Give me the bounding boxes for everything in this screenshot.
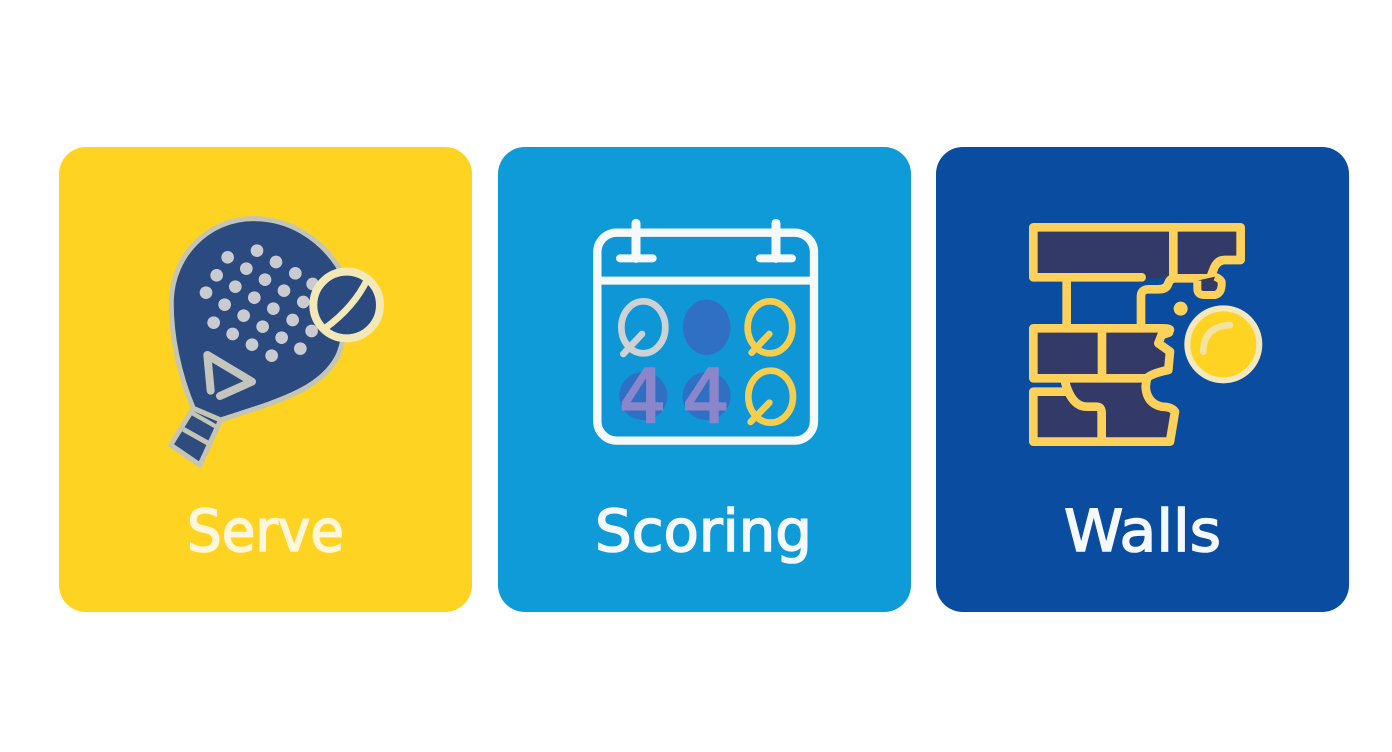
brick fills (1033, 227, 1241, 442)
icon: calendar scoreboard (597, 223, 814, 441)
brick outlines (1033, 227, 1241, 442)
score four middle: 4 (682, 354, 730, 440)
racket holes (200, 244, 319, 362)
score zero yellow top (748, 301, 792, 353)
ball (1187, 308, 1259, 380)
score four left: 4 (619, 354, 666, 440)
racket handle (171, 408, 221, 465)
score zero gray (621, 301, 665, 354)
panel: scoring (498, 147, 911, 612)
serve card background (59, 147, 472, 612)
debris dot (1174, 302, 1188, 316)
score zero yellow bottom (748, 371, 793, 423)
empty score dot (683, 300, 730, 355)
icon: damaged brick wall and ball (1033, 227, 1259, 442)
racket head (171, 219, 345, 420)
panel: serve (59, 147, 472, 612)
icon: padel racket and ball (171, 219, 380, 465)
scoring card background (498, 147, 911, 612)
walls label: Walls (1064, 497, 1221, 565)
walls card background (936, 147, 1349, 612)
ball (313, 272, 380, 338)
racket logo triangle (207, 355, 252, 396)
panel: walls (936, 147, 1349, 612)
scoring label: Scoring (595, 497, 812, 565)
calendar frame (597, 223, 814, 441)
broken brick chip (1197, 277, 1222, 295)
serve label: Serve (187, 497, 344, 565)
